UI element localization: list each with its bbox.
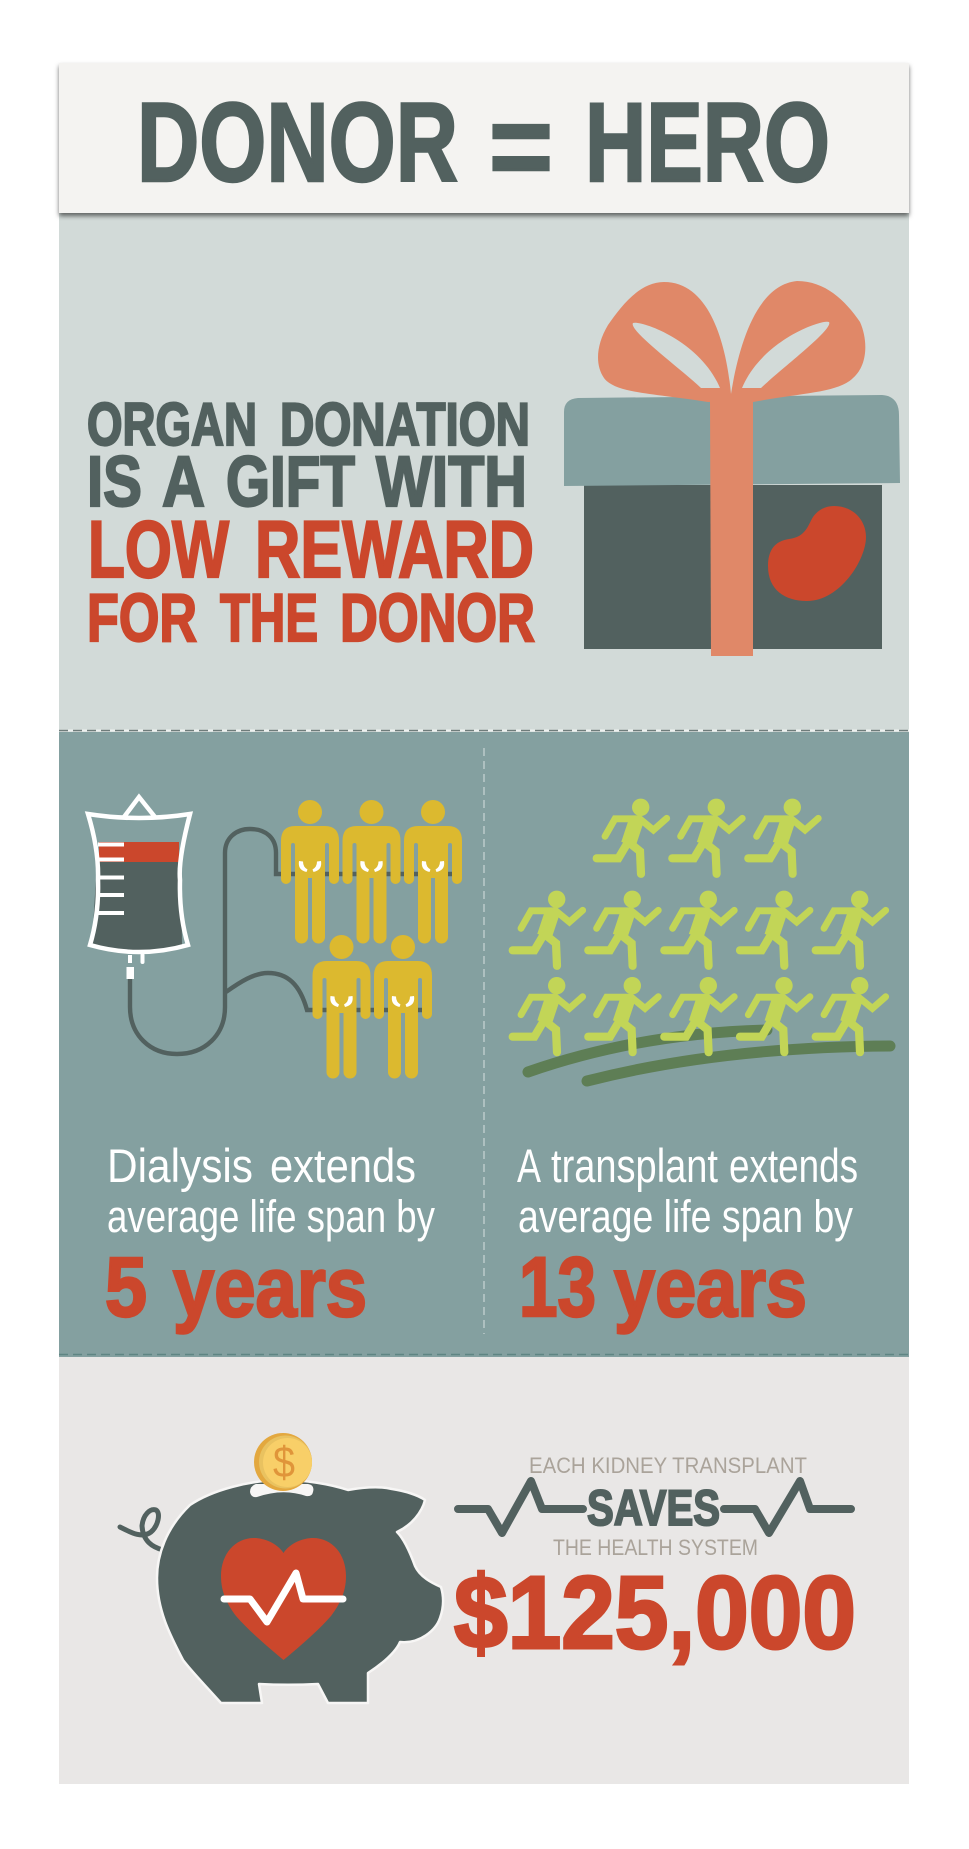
icon: dialysis tubing [130, 829, 452, 1054]
title: DONOR [137, 80, 458, 205]
text: each kidney transplant saves: SAVES [587, 1480, 720, 1536]
title: = [489, 80, 553, 213]
text: each kidney transplant saves [454, 1453, 856, 1670]
heading: organ donation text block: THE [220, 580, 318, 656]
text: transplant statistic: transplant [551, 1139, 718, 1192]
icon: heart with pulse [221, 1538, 346, 1660]
heading: organ donation text block: WITH [376, 443, 527, 522]
panel: gift section background [59, 213, 909, 732]
divider: centre dashed line [483, 748, 485, 1334]
title: HERO [585, 80, 830, 205]
title [137, 80, 830, 213]
text: dialysis statistic: average life span by [107, 1191, 435, 1242]
panel: life span section background [59, 732, 909, 1357]
heading: organ donation text block: GIFT [226, 443, 355, 522]
divider: dashed line between gift and life span sections [59, 730, 909, 732]
text: transplant statistic: extends [729, 1139, 858, 1192]
text: each kidney transplant saves: THE HEALTH SYSTEM [553, 1535, 758, 1560]
icon: gift box with kidney [564, 281, 900, 656]
heading: organ donation text block: A [162, 443, 205, 522]
heading: organ donation text block: DONOR [340, 580, 535, 656]
text: dialysis statistic: 5 [105, 1240, 147, 1334]
icon: coin: $ [273, 1438, 295, 1487]
icon: kidney [768, 506, 866, 601]
heading: organ donation text block: FOR [87, 580, 197, 656]
text: each kidney transplant saves: EACH KIDNEY TRANSPLANT [529, 1453, 807, 1478]
heading: organ donation text block: DONATION [280, 391, 530, 458]
icon: right pulse line [724, 1481, 851, 1533]
icon: running transplant recipients [513, 799, 890, 1081]
divider: dashed line between life span and savings sections [59, 1354, 909, 1356]
icon: piggy bank [120, 1433, 443, 1703]
text: dialysis statistic [105, 1139, 435, 1334]
icon: coin slot [250, 1484, 313, 1497]
icon: IV bag [88, 797, 190, 979]
text: transplant statistic: years [614, 1240, 807, 1334]
text: dialysis statistic: years [173, 1240, 367, 1334]
text: transplant statistic: 13 [519, 1240, 596, 1334]
panel: savings section background [59, 1357, 909, 1784]
icon: dialysis patients [281, 800, 462, 1078]
heading: organ donation text block: REWARD [255, 505, 534, 595]
heading: organ donation text block [87, 391, 535, 656]
text: transplant statistic [517, 1139, 858, 1334]
heading: organ donation text block: ORGAN [87, 391, 257, 458]
text: transplant statistic: average life span by [518, 1191, 853, 1242]
text: dialysis statistic: Dialysis [107, 1139, 253, 1192]
text: savings amount: $125,000 [454, 1555, 856, 1670]
icon: coin [254, 1433, 312, 1491]
title banner [59, 63, 909, 213]
heading: organ donation text block: LOW [88, 505, 229, 595]
text: dialysis statistic: extends [270, 1139, 416, 1192]
heading: organ donation text block: IS [87, 443, 142, 522]
icon: left pulse line [458, 1481, 583, 1533]
text: transplant statistic: A [517, 1139, 541, 1192]
